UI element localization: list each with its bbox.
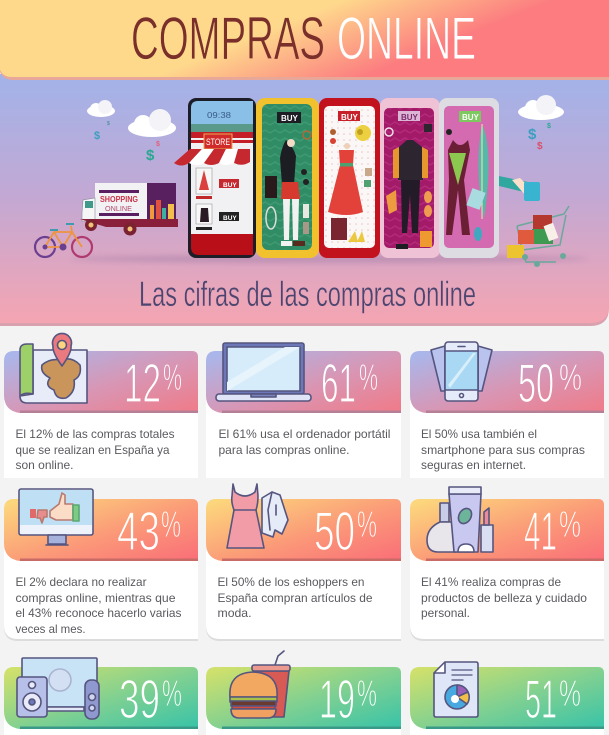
icon: delivery truck: ONLINE	[105, 204, 132, 213]
text	[421, 427, 585, 472]
store sign	[204, 134, 232, 149]
text: que se realizan en España ya	[16, 443, 170, 457]
value: 12	[124, 352, 161, 414]
value: 41	[524, 500, 557, 562]
card: 43%	[4, 489, 198, 641]
card: 39%	[4, 658, 198, 735]
text: El 50% de los eshoppers en	[218, 575, 364, 589]
text: personal.	[421, 606, 470, 620]
icon: phone dress	[319, 98, 380, 258]
value: 50	[518, 352, 554, 414]
store sign: STORE	[206, 137, 230, 147]
value: 39	[119, 668, 160, 730]
icon: monitor thumbs	[19, 489, 93, 545]
text	[16, 575, 182, 636]
value: %	[162, 673, 182, 714]
card: 19%	[206, 651, 401, 735]
title: COMPRAS	[131, 5, 325, 72]
value: 19	[319, 668, 355, 730]
text: smartphone para sus compras	[421, 443, 585, 457]
icon: clouds with dollar signs left: $	[146, 147, 155, 164]
text: productos de belleza y cuidado	[421, 591, 587, 605]
card: 12%	[4, 333, 198, 478]
text: compras online, mientras que	[16, 591, 176, 605]
text: son online.	[16, 458, 74, 472]
value: 50	[314, 500, 355, 562]
striped awning	[174, 149, 250, 166]
value: %	[359, 357, 378, 398]
icon: document with pie chart	[434, 662, 478, 717]
panel: title band	[0, 0, 609, 80]
icon: phone swimwear: BUY	[462, 113, 480, 122]
text	[421, 575, 587, 620]
icon: hand with card	[499, 176, 540, 201]
icon: laptop	[216, 343, 311, 401]
value: %	[559, 673, 581, 714]
icon: phone swimwear	[439, 98, 499, 258]
panel: hero banner	[0, 74, 609, 326]
card: 50% smartphone	[410, 342, 604, 478]
icon: clouds with dollar signs left: $	[107, 121, 110, 127]
icon: clouds with dollar signs left: $	[156, 141, 160, 148]
icon: phone store	[174, 98, 256, 258]
icon: clouds with dollar signs left	[87, 100, 176, 164]
text: seguras en internet.	[421, 458, 526, 472]
value: 51	[525, 668, 557, 730]
value: %	[357, 673, 377, 714]
text: moda.	[218, 606, 252, 620]
icon: delivery truck: SHOPPING	[100, 195, 138, 204]
icon: burger and drink	[230, 651, 290, 718]
icon: bicycle	[35, 224, 92, 257]
text: El 2% declara no realizar	[16, 575, 146, 589]
icon: cloud with dollar signs right	[518, 95, 564, 152]
icon: phone store: 09:38	[207, 111, 232, 120]
text: España compran artículos de	[218, 591, 373, 605]
icon: cloud with dollar signs right: $	[547, 123, 551, 130]
icon: phone dress: BUY	[341, 113, 359, 122]
card: 50% fashion	[206, 484, 401, 641]
value: %	[163, 357, 182, 398]
value: %	[559, 504, 581, 545]
text: El 41% realiza compras de	[421, 575, 561, 589]
icon: phone sport	[256, 98, 319, 258]
icon: delivery truck	[80, 183, 178, 236]
icon: phone store: BUY	[223, 215, 237, 222]
icon: phone sport: BUY	[281, 114, 299, 123]
icon: map with pin	[20, 333, 87, 403]
icon: phone jacket: BUY	[401, 113, 419, 122]
icon: phone store: BUY	[223, 182, 237, 189]
icon: dress and shirt	[227, 484, 288, 548]
value: 61	[321, 352, 356, 414]
icon: cloud with dollar signs right: $	[537, 141, 543, 152]
text: para las compras online.	[218, 443, 350, 457]
icon: smartphone	[431, 342, 492, 401]
card: 41%	[410, 487, 604, 641]
value: %	[161, 504, 181, 545]
value: 43	[117, 500, 160, 562]
icon: cloud with dollar signs right: $	[528, 126, 537, 143]
icon: clouds with dollar signs left: $	[94, 130, 100, 142]
title: ONLINE	[337, 5, 476, 72]
card: 51%	[410, 662, 604, 735]
text: el 43% reconoce hacerlo varias	[16, 606, 182, 620]
icon: tv speaker remote	[17, 658, 99, 719]
text	[218, 575, 373, 620]
card: 61%	[206, 343, 401, 478]
icon: shopping cart	[507, 206, 569, 267]
value: %	[559, 357, 582, 398]
icon: cosmetics	[427, 487, 493, 552]
text	[16, 427, 174, 472]
text: veces al mes.	[16, 622, 86, 636]
text: El 12% de las compras totales	[16, 427, 174, 441]
value: %	[357, 504, 377, 545]
text: El 50% usa también el	[421, 427, 537, 441]
text: El 61% usa el ordenador portátil	[218, 427, 390, 441]
icon: phone jacket	[380, 98, 440, 258]
text	[218, 427, 390, 457]
